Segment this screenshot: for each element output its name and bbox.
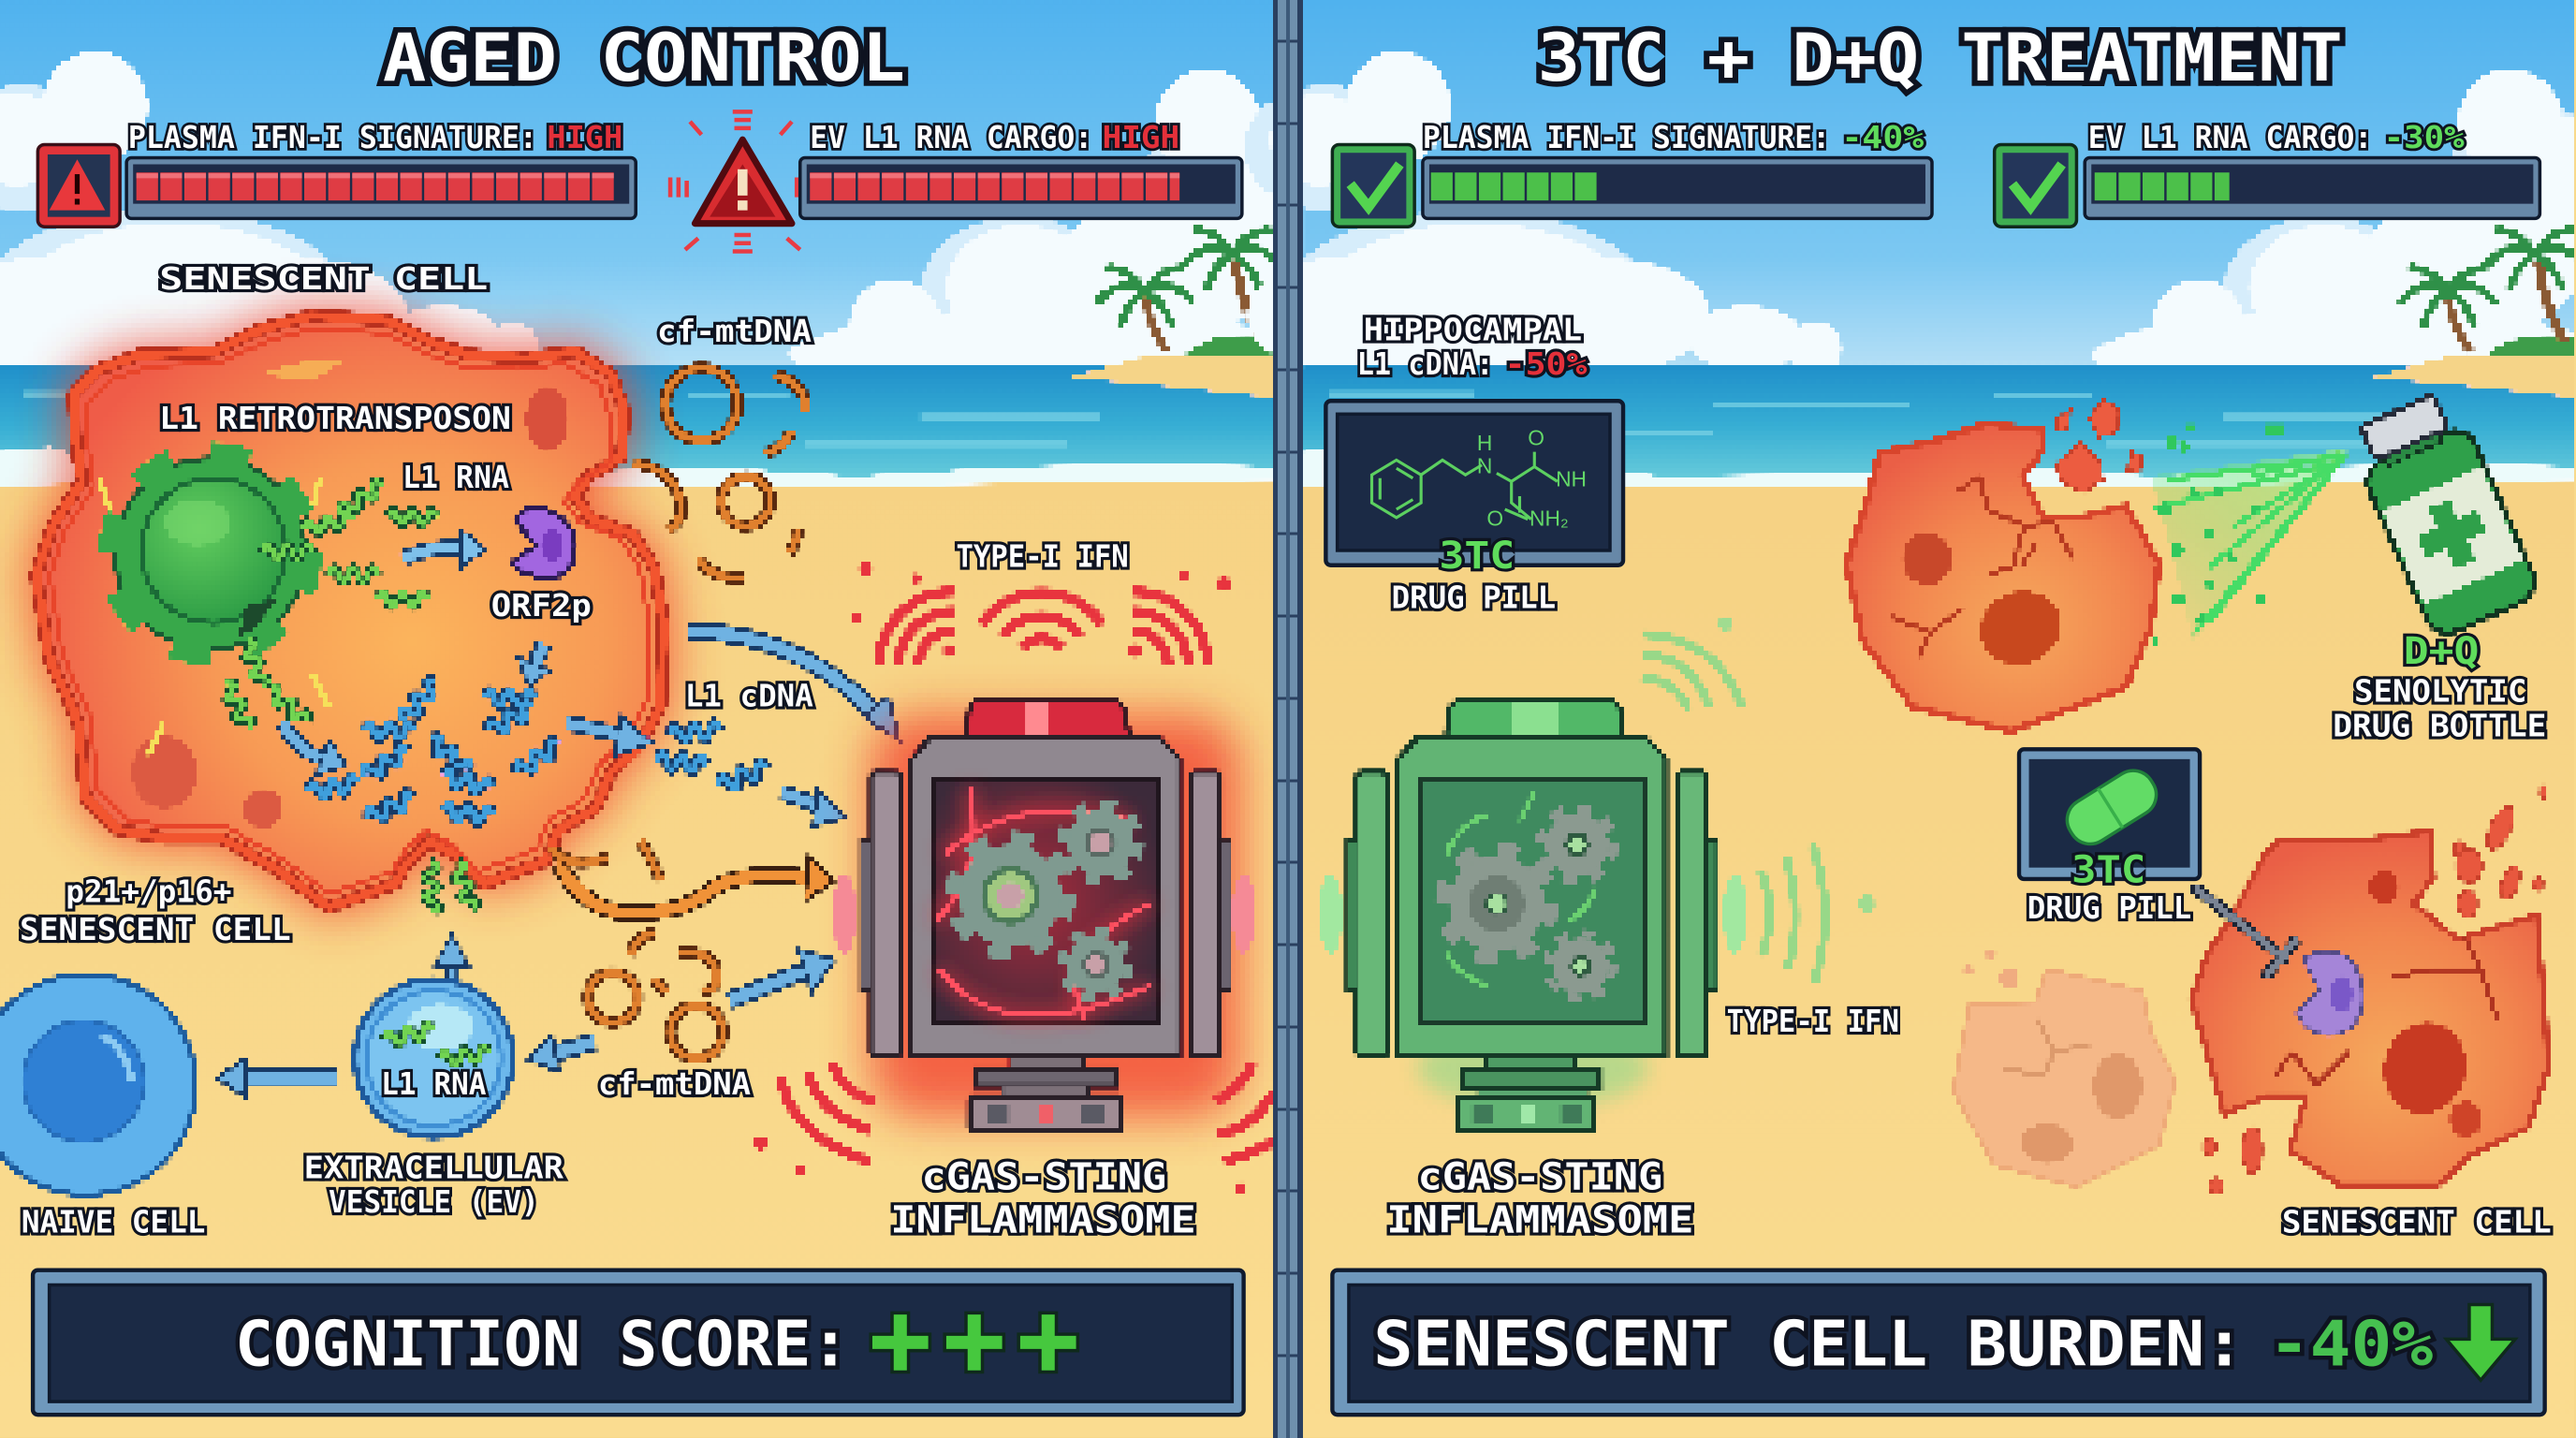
fragments <box>2203 785 2546 1195</box>
artwork: aged control pathway <box>0 315 1273 1195</box>
arrow: orange cf-mtDNA path <box>559 858 835 914</box>
label: D+Q senolytic drug bottle: SENOLYTIC <box>2354 672 2526 709</box>
cf-mtDNA rings upper <box>634 368 805 579</box>
label: cf-mtDNA top: cf-mtDNA <box>657 313 812 349</box>
bar: plasma IFN-I reduced <box>1423 157 1932 218</box>
panel: 3TC + D+Q treatment labels and meters <box>1325 20 2552 1415</box>
label: drug pill: DRUG PILL <box>1392 579 1556 615</box>
ghost dying cell <box>1954 949 2175 1186</box>
panel: cognition score <box>33 1270 1244 1415</box>
artwork: treatment pathway <box>1319 388 2548 1195</box>
icon: check box left <box>1332 144 1414 227</box>
icon: D+Q senolytic bottle <box>2345 388 2541 640</box>
label: plasma IFN-I -40%: PLASMA IFN-I SIGNATURE: <box>1423 119 1830 155</box>
L1 RNA leaving cell <box>424 860 478 912</box>
label: cf-mtDNA bottom: cf-mtDNA <box>598 1065 751 1102</box>
label: cGAS-STING inflammasome: INFLAMMASOME <box>1386 1197 1694 1241</box>
label: ORF2p: ORF2p <box>491 587 592 624</box>
cf-mtDNA lower <box>552 842 723 1058</box>
label: extracellular vesicle <box>304 1149 564 1220</box>
arrow: EV up <box>435 935 468 983</box>
inflammasome: green <box>1319 700 1747 1131</box>
label: 3TC pill: 3TC <box>2071 847 2145 891</box>
label: senescent cell: SENESCENT CELL <box>2282 1203 2552 1240</box>
arrow: cf-mtDNA to vesicle <box>529 1035 594 1071</box>
icon: down arrow <box>2446 1305 2515 1380</box>
arrow: cDNA exit <box>567 716 652 756</box>
center divider <box>1273 0 1303 1438</box>
panel: senescent cell burden: -40% <box>2269 1307 2433 1380</box>
fragments <box>2056 399 2143 493</box>
label: p21+/p16+ senescent cell <box>20 873 291 947</box>
L1 cDNA cluster <box>308 677 563 825</box>
icon: warning box <box>37 144 120 227</box>
label: EV L1 RNA -30%: -30% <box>2384 119 2465 155</box>
senescent cell with glow <box>37 315 664 907</box>
panel: 3TC molecule <box>1325 401 1623 565</box>
panel: aged control labels and meters <box>20 20 1244 1415</box>
panel: senescent cell burden <box>1332 1270 2545 1415</box>
label: plasma IFN-I -40%: -40% <box>1841 119 1924 155</box>
naive cell <box>0 975 196 1195</box>
inhibitor line <box>2197 889 2295 975</box>
label: cGAS-STING inflammasome: cGAS-STING <box>1418 1155 1662 1199</box>
label: 3TC: 3TC <box>1439 534 1515 578</box>
label: L1 cDNA: L1 cDNA <box>685 678 813 714</box>
L1 RNA strands <box>221 479 437 731</box>
icon: large alarm triangle <box>670 111 805 252</box>
icon: ORF2p <box>513 508 576 579</box>
title: aged control: AGED CONTROL <box>383 20 905 96</box>
label: EV L1 RNA cargo high: EV L1 RNA CARGO: <box>810 119 1092 155</box>
label: hippocampal L1 cDNA <box>1357 311 1587 382</box>
label: cGAS-STING inflammasome <box>1386 1155 1694 1241</box>
label: type-I IFN: TYPE-I IFN <box>956 538 1129 575</box>
title: treatment: 3TC + D+Q TREATMENT <box>1538 20 2343 96</box>
arrow: cf-mtDNA to inflammasome <box>729 949 835 1001</box>
panel: 3TC molecule: H <box>1477 431 1492 455</box>
bar: EV L1 RNA reduced <box>2085 157 2539 218</box>
inflammasome: red <box>833 698 1255 1131</box>
label: plasma IFN-I signature high: PLASMA IFN-I SIGNATURE: <box>128 119 537 155</box>
label: extracellular vesicle: EXTRACELLULAR <box>304 1149 564 1185</box>
arrow: cDNA to inflammasome <box>782 788 846 827</box>
panel: 3TC pill <box>2019 749 2200 879</box>
arrow: strand to cDNA <box>283 723 346 775</box>
type-I IFN reduced waves <box>1641 634 1824 983</box>
label: hippocampal L1 cDNA: -50% <box>1505 345 1587 382</box>
label: drug pill: DRUG PILL <box>2027 889 2191 926</box>
molecule structure <box>1372 452 1558 520</box>
spray from bottle <box>2150 424 2349 645</box>
label: L1 RNA: L1 RNA <box>402 459 509 495</box>
label: hippocampal L1 cDNA: L1 cDNA: <box>1357 345 1493 382</box>
label: plasma IFN-I signature high: HIGH <box>547 119 622 155</box>
icon: pill <box>2059 763 2164 852</box>
label: D+Q senolytic drug bottle <box>2333 629 2546 743</box>
label: EV L1 RNA cargo high: HIGH <box>1103 119 1179 155</box>
icon: green plus signs <box>871 1313 1077 1372</box>
panel: 3TC molecule: NH <box>1556 467 1587 492</box>
panel: 3TC molecule: O <box>1528 426 1544 450</box>
label: D+Q senolytic drug bottle: DRUG BOTTLE <box>2333 707 2546 743</box>
label: senescent cell: SENESCENT CELL <box>159 260 488 297</box>
arrow: curved to inflammasome <box>687 631 899 740</box>
label: EV L1 RNA -30%: EV L1 RNA CARGO: <box>2088 119 2372 155</box>
label: L1 RNA in vesicle: L1 RNA <box>381 1065 487 1102</box>
panel: 3TC molecule: NH₂ <box>1530 506 1569 531</box>
panel: senescent cell burden: SENESCENT CELL BURDEN: <box>1373 1307 2244 1380</box>
label: p21+/p16+ senescent cell: SENESCENT CELL <box>20 911 291 947</box>
label: L1 retrotransposon: L1 RETROTRANSPOSON <box>159 400 511 436</box>
label: p21+/p16+ senescent cell: p21+/p16+ <box>66 873 231 910</box>
L1 cDNA free strands <box>656 723 768 792</box>
arrow: EV to naive cell <box>217 1058 335 1097</box>
damaged senescent cell lower <box>2191 785 2548 1195</box>
arrow: ORF2p down <box>518 644 550 687</box>
panel: 3TC molecule: O <box>1486 506 1503 531</box>
label: cGAS-STING inflammasome <box>890 1155 1196 1241</box>
arrow: L1 RNA to ORF2p <box>402 529 487 568</box>
type-I IFN waves <box>781 592 1273 1162</box>
panel: cognition score: COGNITION SCORE: <box>235 1307 849 1380</box>
extracellular vesicle <box>355 979 513 1137</box>
label: hippocampal L1 cDNA: HIPPOCAMPAL <box>1364 311 1582 347</box>
label: D+Q senolytic drug bottle: D+Q <box>2404 629 2479 673</box>
bar: EV L1 RNA high <box>800 157 1242 218</box>
nucleus: L1 retrotransposon gear <box>111 455 309 653</box>
label: cGAS-STING inflammasome: INFLAMMASOME <box>890 1197 1196 1241</box>
label: naive cell: NAIVE CELL <box>22 1203 205 1240</box>
faint dots <box>1719 618 1875 912</box>
icon: check box right <box>1995 144 2076 227</box>
damaged senescent cell upper <box>1847 399 2159 731</box>
IFN particles <box>754 562 1246 1194</box>
label: cGAS-STING inflammasome: cGAS-STING <box>922 1155 1166 1199</box>
panel: 3TC molecule: N <box>1477 453 1492 477</box>
icon: ORF2p <box>2297 951 2363 1035</box>
label: extracellular vesicle: VESICLE (EV) <box>329 1183 539 1220</box>
label: type-I IFN: TYPE-I IFN <box>1727 1003 1899 1039</box>
bar: plasma IFN-I high <box>126 157 636 218</box>
